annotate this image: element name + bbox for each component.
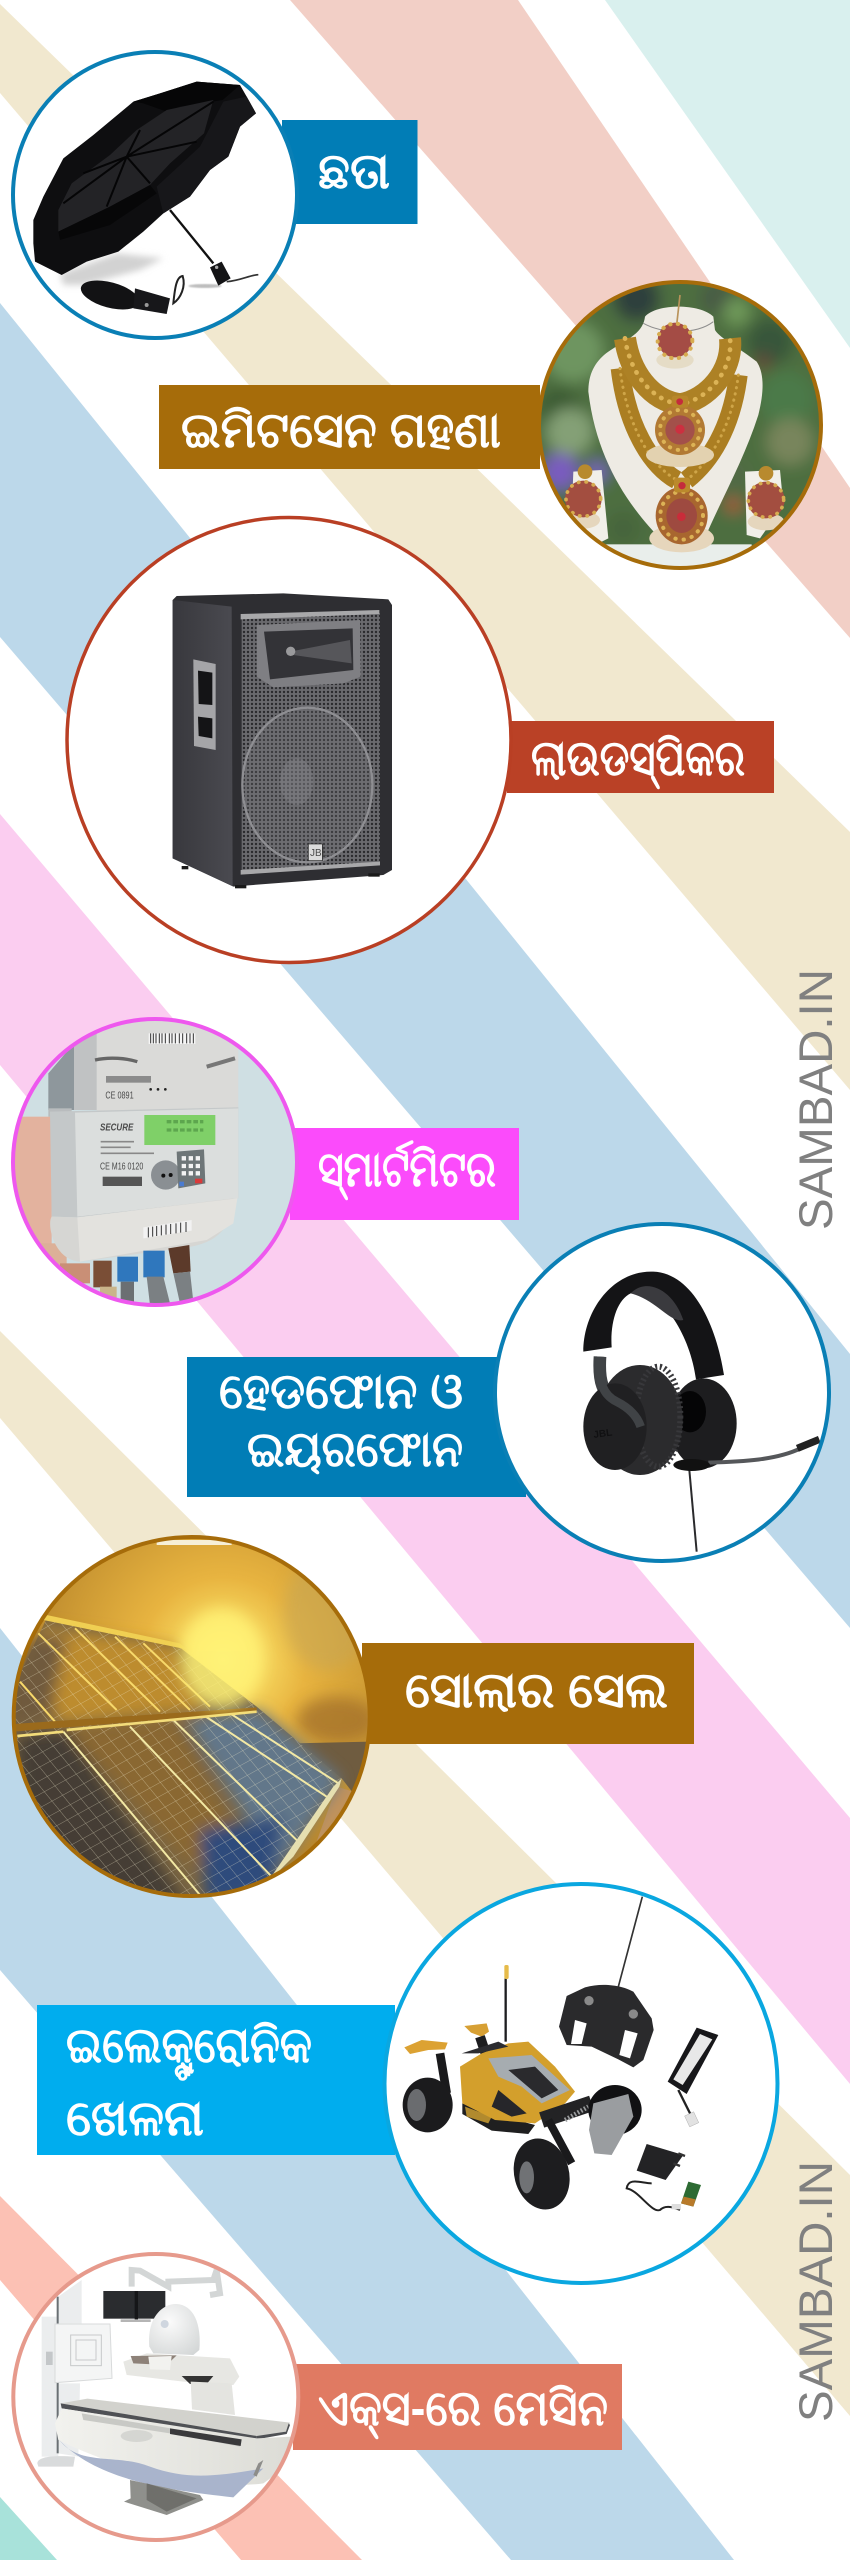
circle: headphones photo: JBL [593,1427,613,1441]
watermark: lower: SAMBAD.IN [789,2161,842,2422]
circle: smart meter photo: CE 0891 [105,1090,134,1101]
circle: smart meter photo: SECURE [100,1123,134,1134]
label: imitation jewellery: ଇମିଟସେନ ଗହଣା [181,402,501,458]
circle: loudspeaker photo [67,518,511,962]
label: solar cell [362,1643,694,1744]
label: umbrella [282,120,418,224]
circle: x-ray machine photo [13,2254,298,2540]
circle: headphones photo [495,1224,829,1561]
label: smart meter [290,1128,519,1220]
circle: imitation jewellery photo [540,280,823,570]
circle: smart meter photo: CE M16 0120 [100,1161,144,1172]
label: electronic toys: ଇଲେକ୍ଟ୍ରୋନିକ [66,2017,312,2082]
circle: electronic toy photo [384,1884,778,2283]
circle: smart meter photo [10,1019,297,1305]
label: x-ray machine [293,2364,622,2450]
watermark: upper: SAMBAD.IN [789,969,842,1230]
label: headphone and earphone: ଇୟରଫୋନ [247,1421,463,1477]
label: x-ray machine: ଏକ୍ସ-ରେ ମେସିନ [318,2380,608,2440]
label: loudspeaker [507,721,774,793]
label: electronic toys: ଖେଳନା [66,2090,204,2146]
circle: solar panels photo [0,1530,380,1905]
label: umbrella: ଛତା [318,143,390,199]
label: solar cell: ସୋଲାର ସେଲ [405,1662,668,1718]
label: electronic toys [37,2005,395,2155]
label: smart meter: ସ୍ମାର୍ଟମିଟର [318,1140,496,1201]
label: headphone and earphone: ହେଡଫୋନ ଓ [219,1363,463,1419]
label: imitation jewellery [159,385,540,469]
label: loudspeaker: ଲାଉଡସ୍ପିକର [531,730,745,790]
circle: loudspeaker photo: JBL [310,848,328,859]
circle: umbrella photo [13,52,297,338]
label: headphone and earphone [187,1357,526,1497]
